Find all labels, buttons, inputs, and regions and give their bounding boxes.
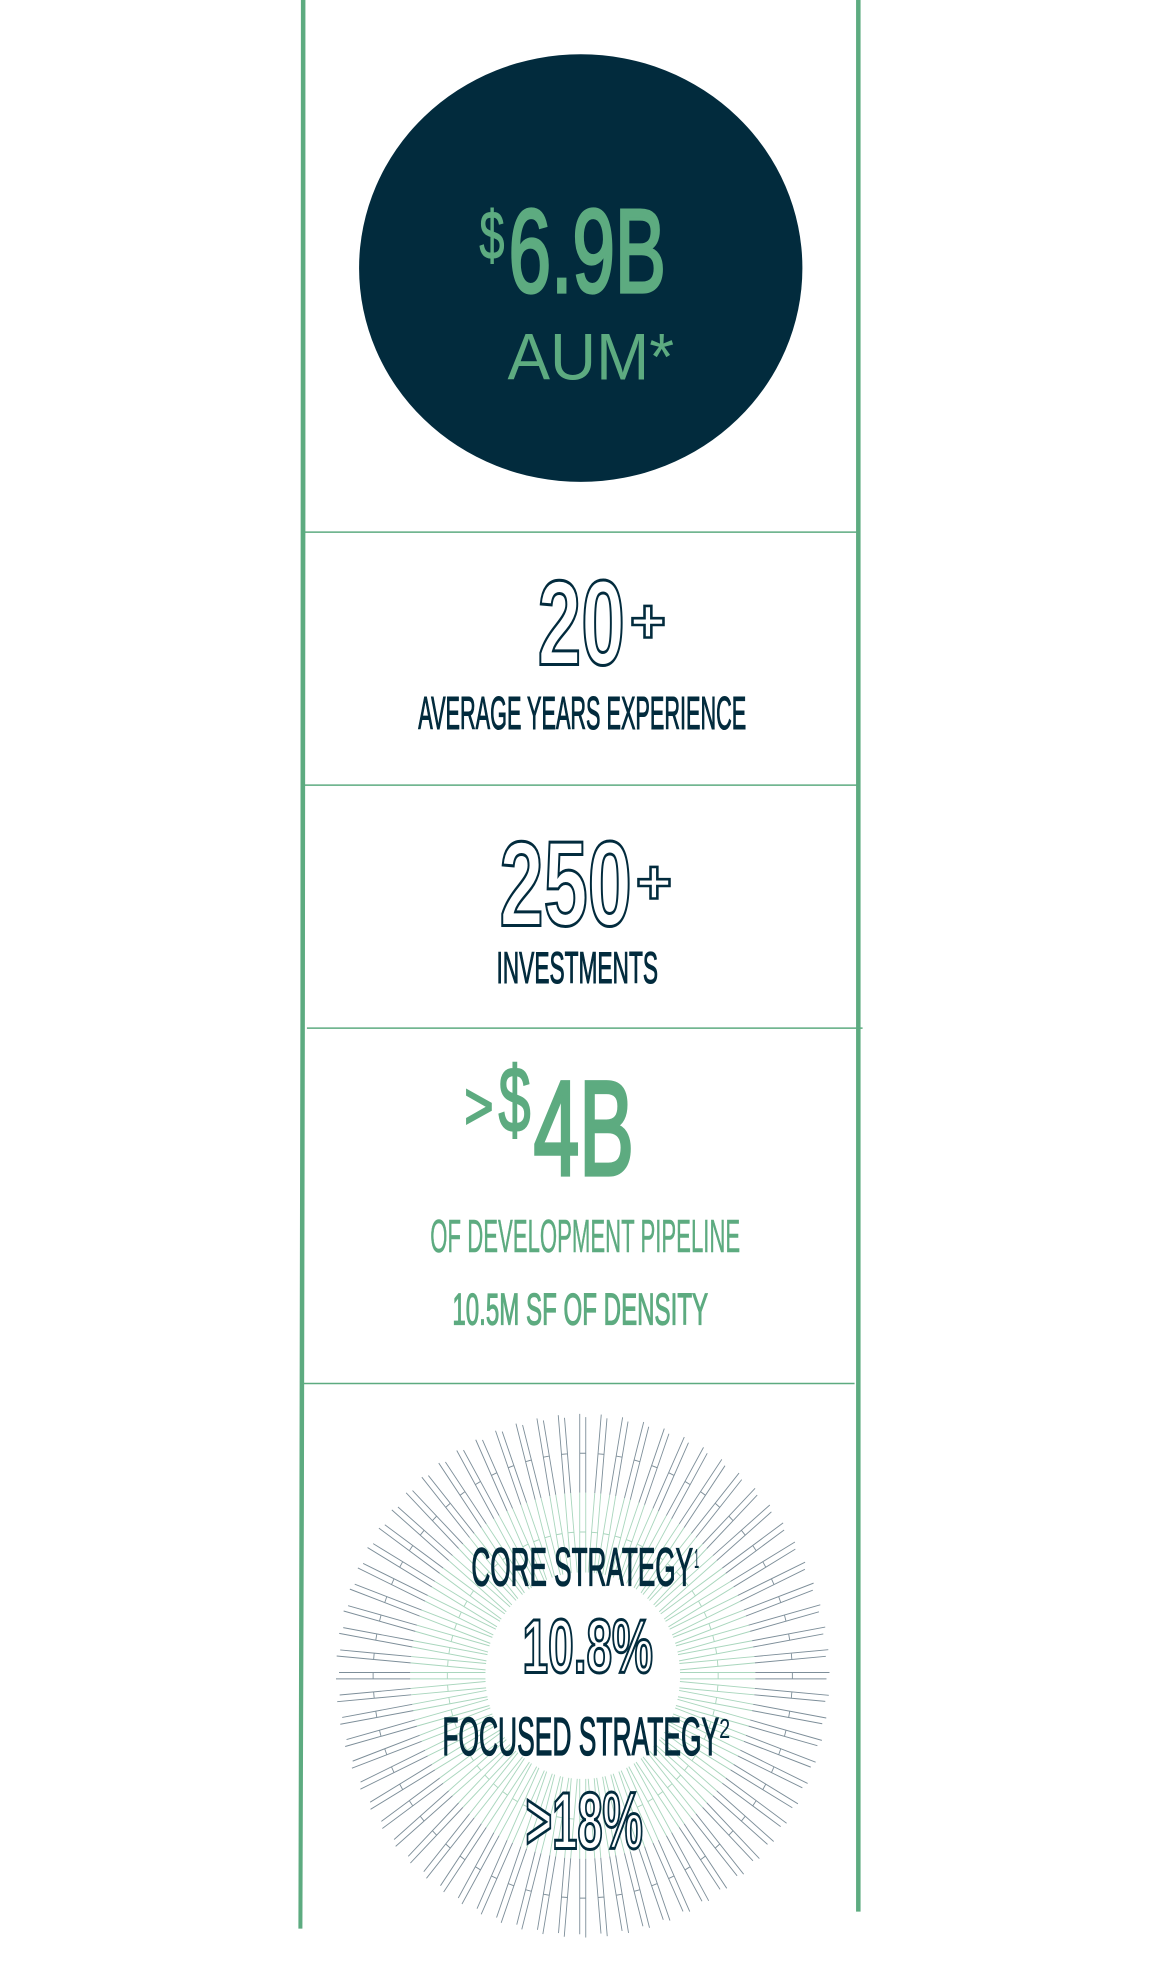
dollar sign: $ <box>479 198 505 274</box>
right vertical rule <box>856 0 861 1912</box>
plus sign: + <box>630 588 666 657</box>
panel: strategy returns: 1 <box>694 1543 699 1574</box>
panel: experience <box>418 556 746 739</box>
panel: development pipeline <box>430 1047 740 1334</box>
left vertical rule <box>298 0 305 1929</box>
panel: strategy returns: FOCUSED STRATEGY <box>442 1707 719 1767</box>
AUM label: AUM* <box>508 320 674 395</box>
4B value: 4B <box>534 1054 634 1204</box>
infographic content: OF DEVELOPMENT PIPELINE <box>430 1210 740 1262</box>
20+ figure: 20 <box>538 556 625 691</box>
infographic content: AVERAGE YEARS EXPERIENCE <box>418 687 746 739</box>
infographic content <box>298 0 863 1937</box>
focused strategy value: >18% <box>526 1776 643 1866</box>
radial burst <box>336 1414 829 1937</box>
AUM value: 6.9B <box>509 186 666 318</box>
dark circle <box>359 54 802 482</box>
greater-than sign: > <box>464 1069 493 1144</box>
panel: strategy returns <box>336 1414 829 1937</box>
panel: investments <box>496 817 672 993</box>
plus sign: + <box>636 849 672 918</box>
footnote 2: 2 <box>719 1713 730 1744</box>
core strategy value: 10.8% <box>523 1605 653 1690</box>
250+ figure: 250 <box>499 817 632 952</box>
panel: AUM <box>359 54 802 482</box>
dollar sign: $ <box>498 1047 531 1152</box>
investments label: INVESTMENTS <box>496 944 658 993</box>
panel: strategy returns: CORE STRATEGY <box>471 1537 693 1597</box>
density label: 10.5M SF OF DENSITY <box>452 1285 708 1334</box>
divider lines <box>303 532 863 1384</box>
